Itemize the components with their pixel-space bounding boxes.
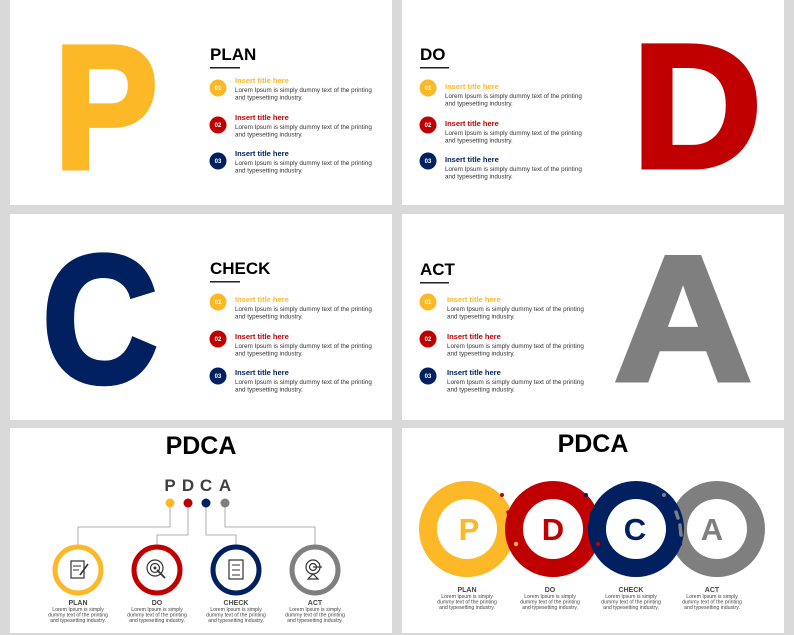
list items: plan: 01	[215, 86, 222, 92]
list items: check: and typesetting industry.	[235, 350, 303, 358]
heading: CHECK: CHECK	[210, 259, 271, 278]
panel: pdca icons	[10, 428, 392, 633]
list items: check: Insert title here	[235, 295, 289, 304]
list items: do: Insert title here	[445, 119, 499, 128]
ring letters: P	[459, 512, 479, 547]
list items: plan: Lorem Ipsum is simply dummy text of the printing	[235, 160, 372, 167]
list items: act: Insert title here	[447, 295, 501, 304]
labels and captions: dummy text of the printing	[127, 612, 187, 618]
labels and captions: dummy text of the printing	[682, 600, 742, 606]
list items: check: Insert title here	[235, 368, 289, 377]
icon circle: check	[213, 547, 259, 593]
labels and captions: and typesetting industry.	[208, 618, 264, 624]
labels and captions: DO	[152, 600, 163, 607]
list items: act: 02	[425, 337, 432, 343]
list items: plan: 02	[215, 123, 222, 129]
list items: do: Lorem Ipsum is simply dummy text of the printing	[445, 130, 582, 137]
list items: plan: Lorem Ipsum is simply dummy text of the printing	[235, 124, 372, 131]
list items: act: 01	[425, 300, 432, 306]
panel: do	[402, 0, 784, 205]
ring letters: D	[542, 512, 564, 547]
heading: ACT: ACT	[420, 260, 456, 279]
heading: PLAN: PLAN	[210, 45, 256, 64]
labels and captions: Lorem Ipsum is simply	[289, 607, 341, 613]
list items: check: 01	[215, 300, 222, 306]
labels and captions: CHECK	[224, 600, 248, 607]
list items: act: 03	[425, 374, 432, 380]
list items: do: Insert title here	[445, 155, 499, 164]
letters row	[164, 476, 231, 495]
labels and captions: ACT	[705, 587, 720, 594]
list items: act: Lorem Ipsum is simply dummy text of the printing	[447, 379, 584, 386]
heading: PDCA: PDCA	[558, 430, 628, 458]
list items: do: Lorem Ipsum is simply dummy text of the printing	[445, 166, 582, 173]
panel: pdca rings	[402, 428, 784, 633]
list items: act: and typesetting industry.	[447, 386, 515, 394]
labels and captions: and typesetting industry.	[50, 618, 106, 624]
labels and captions: PLAN	[457, 587, 477, 594]
labels and captions: Lorem Ipsum is simply	[605, 594, 657, 600]
list items: do: and typesetting industry.	[445, 100, 513, 108]
list items: plan: 03	[215, 159, 222, 165]
list items: plan	[210, 76, 372, 174]
list items: plan: Insert title here	[235, 113, 289, 122]
labels and captions: dummy text of the printing	[601, 600, 661, 606]
labels and captions: dummy text of the printing	[48, 612, 108, 618]
big letter P: P	[54, 10, 158, 206]
list items: check: and typesetting industry.	[235, 314, 303, 320]
labels and captions: Lorem Ipsum is simply	[686, 594, 738, 600]
list items: check: Lorem Ipsum is simply dummy text of the printing	[235, 343, 372, 350]
list items: plan: and typesetting industry.	[235, 132, 303, 138]
list items: act: and typesetting industry.	[447, 314, 515, 320]
connector lines	[78, 503, 315, 546]
letters row: P	[164, 476, 176, 495]
labels and captions: Lorem Ipsum is simply	[210, 607, 262, 613]
labels and captions: dummy text of the printing	[437, 600, 497, 606]
rings	[419, 481, 765, 577]
list items: do: 03	[425, 159, 432, 165]
ring letters: C	[624, 512, 646, 547]
labels and captions: CHECK	[619, 587, 643, 594]
list items: check: 03	[215, 374, 222, 380]
labels and captions	[437, 587, 742, 611]
list items: do: and typesetting industry.	[445, 174, 513, 180]
list items: plan: and typesetting industry.	[235, 168, 303, 174]
list items: plan: and typesetting industry.	[235, 94, 303, 102]
labels and captions: Lorem Ipsum is simply	[131, 607, 183, 613]
labels and captions: and typesetting industry.	[439, 605, 495, 611]
icon circle: act	[292, 547, 338, 593]
letters row: C	[200, 476, 212, 495]
list items: check: Insert title here	[235, 332, 289, 341]
list items: check	[210, 294, 372, 394]
list items: do	[420, 80, 582, 180]
labels and captions: Lorem Ipsum is simply	[441, 594, 493, 600]
list items: do: and typesetting industry.	[445, 138, 513, 144]
list items: plan: Insert title here	[235, 76, 289, 85]
list items: act: Lorem Ipsum is simply dummy text of the printing	[447, 306, 584, 313]
list items: check: and typesetting industry.	[235, 386, 303, 394]
labels and captions: and typesetting industry.	[129, 618, 185, 624]
list items: plan: Lorem Ipsum is simply dummy text of the printing	[235, 87, 372, 94]
labels and captions: and typesetting industry.	[603, 605, 659, 611]
labels and captions: and typesetting industry.	[522, 605, 578, 611]
letters row: D	[182, 476, 194, 495]
icon circle: plan	[55, 547, 101, 593]
list items: act: Insert title here	[447, 368, 501, 377]
heading: DO: DO	[420, 45, 446, 64]
list items: act	[420, 294, 584, 394]
labels and captions: Lorem Ipsum is simply	[52, 607, 104, 613]
dots	[166, 498, 230, 508]
labels and captions: dummy text of the printing	[206, 612, 266, 618]
list items: do: Lorem Ipsum is simply dummy text of the printing	[445, 93, 582, 100]
list items: do: 02	[425, 123, 432, 129]
icon circle: do	[134, 547, 180, 593]
list items: check: Lorem Ipsum is simply dummy text of the printing	[235, 306, 372, 313]
list items: act: and typesetting industry.	[447, 350, 515, 358]
list items: plan: Insert title here	[235, 149, 289, 158]
labels and captions: dummy text of the printing	[520, 600, 580, 606]
labels and captions: ACT	[308, 600, 323, 607]
labels and captions: PLAN	[68, 600, 88, 607]
panel: plan	[10, 0, 392, 206]
labels and captions: Lorem Ipsum is simply	[524, 594, 576, 600]
letters row: A	[219, 476, 231, 495]
labels and captions: and typesetting industry.	[684, 605, 740, 611]
heading: PDCA: PDCA	[166, 432, 236, 460]
labels and captions	[48, 600, 345, 624]
panel: act	[402, 214, 784, 420]
ring letters	[459, 512, 723, 547]
list items: do: Insert title here	[445, 82, 499, 91]
big letter C: C	[42, 217, 158, 421]
list items: check: Lorem Ipsum is simply dummy text of the printing	[235, 379, 372, 386]
labels and captions: and typesetting industry.	[287, 618, 343, 624]
list items: do: 01	[425, 86, 432, 92]
labels and captions: dummy text of the printing	[285, 612, 345, 618]
big letter D: D	[632, 9, 762, 205]
list items: act: Insert title here	[447, 332, 501, 341]
labels and captions: DO	[545, 587, 556, 594]
list items: act: Lorem Ipsum is simply dummy text of the printing	[447, 343, 584, 350]
list items: check: 02	[215, 337, 222, 343]
big letter A: A	[614, 219, 752, 418]
panel: check	[10, 214, 392, 421]
ring letters: A	[701, 512, 723, 547]
